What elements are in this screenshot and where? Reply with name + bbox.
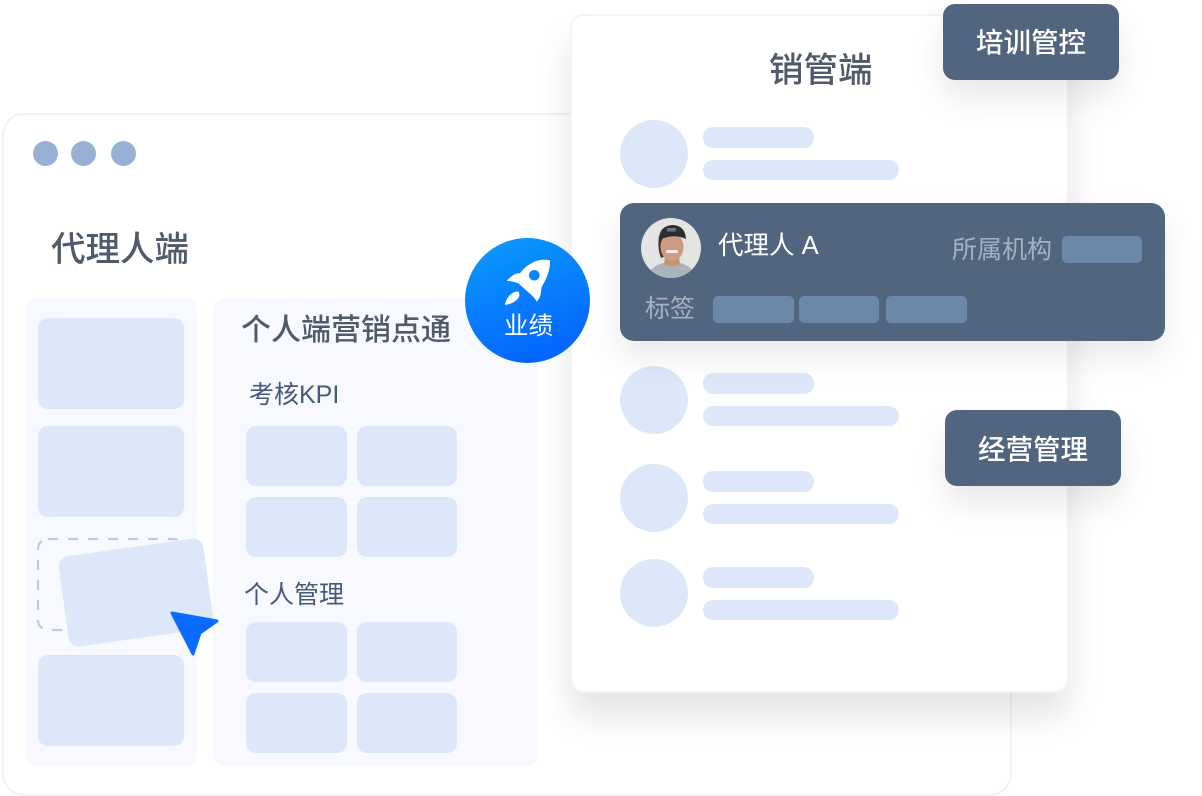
dragged tilted card <box>57 537 215 648</box>
heading: sales management: 销管端 <box>769 52 872 90</box>
panel: agent client window <box>2 113 1012 796</box>
subheading: personal management: 个人管理 <box>244 581 344 609</box>
list row 4 <box>620 464 899 532</box>
icon: rocket <box>505 260 550 305</box>
badge: training control: 培训管控 <box>976 27 1086 58</box>
window control dots <box>33 141 136 166</box>
tags label: 标签 <box>645 295 695 323</box>
badge label: 业绩 <box>504 313 553 340</box>
affiliation label: 所属机构 <box>952 236 1052 264</box>
heading: personal marketing: 个人端营销点通 <box>241 314 451 347</box>
badge: operations management <box>945 410 1121 486</box>
tag placeholder 2 <box>799 296 879 323</box>
badge: performance rocket <box>465 238 590 363</box>
affiliation value placeholder <box>1062 236 1142 263</box>
agent name: 代理人 A <box>718 232 819 260</box>
list row 3 <box>620 366 899 434</box>
list row 5 <box>620 559 899 627</box>
list row 1 <box>620 120 899 188</box>
tag placeholder 3 <box>886 296 967 323</box>
highlighted agent card <box>620 203 1165 341</box>
tag placeholder 1 <box>713 296 794 323</box>
personal management card grid <box>246 622 457 753</box>
panel: sales management window <box>570 14 1069 693</box>
avatar <box>641 218 701 278</box>
icon: cursor arrow <box>170 612 218 656</box>
heading: agent client: 代理人端 <box>51 231 189 269</box>
panel: left column <box>25 298 197 766</box>
badge: training control <box>943 4 1119 80</box>
KPI card grid <box>246 426 457 557</box>
placeholder card 4 <box>38 655 184 746</box>
placeholder card 2 <box>38 426 184 517</box>
badge: operations management: 经营管理 <box>978 434 1088 465</box>
placeholder card 1 <box>38 318 184 409</box>
panel: personal marketing <box>213 298 538 766</box>
subheading: KPI: 考核KPI <box>249 381 339 409</box>
dashed drop target <box>36 538 178 632</box>
